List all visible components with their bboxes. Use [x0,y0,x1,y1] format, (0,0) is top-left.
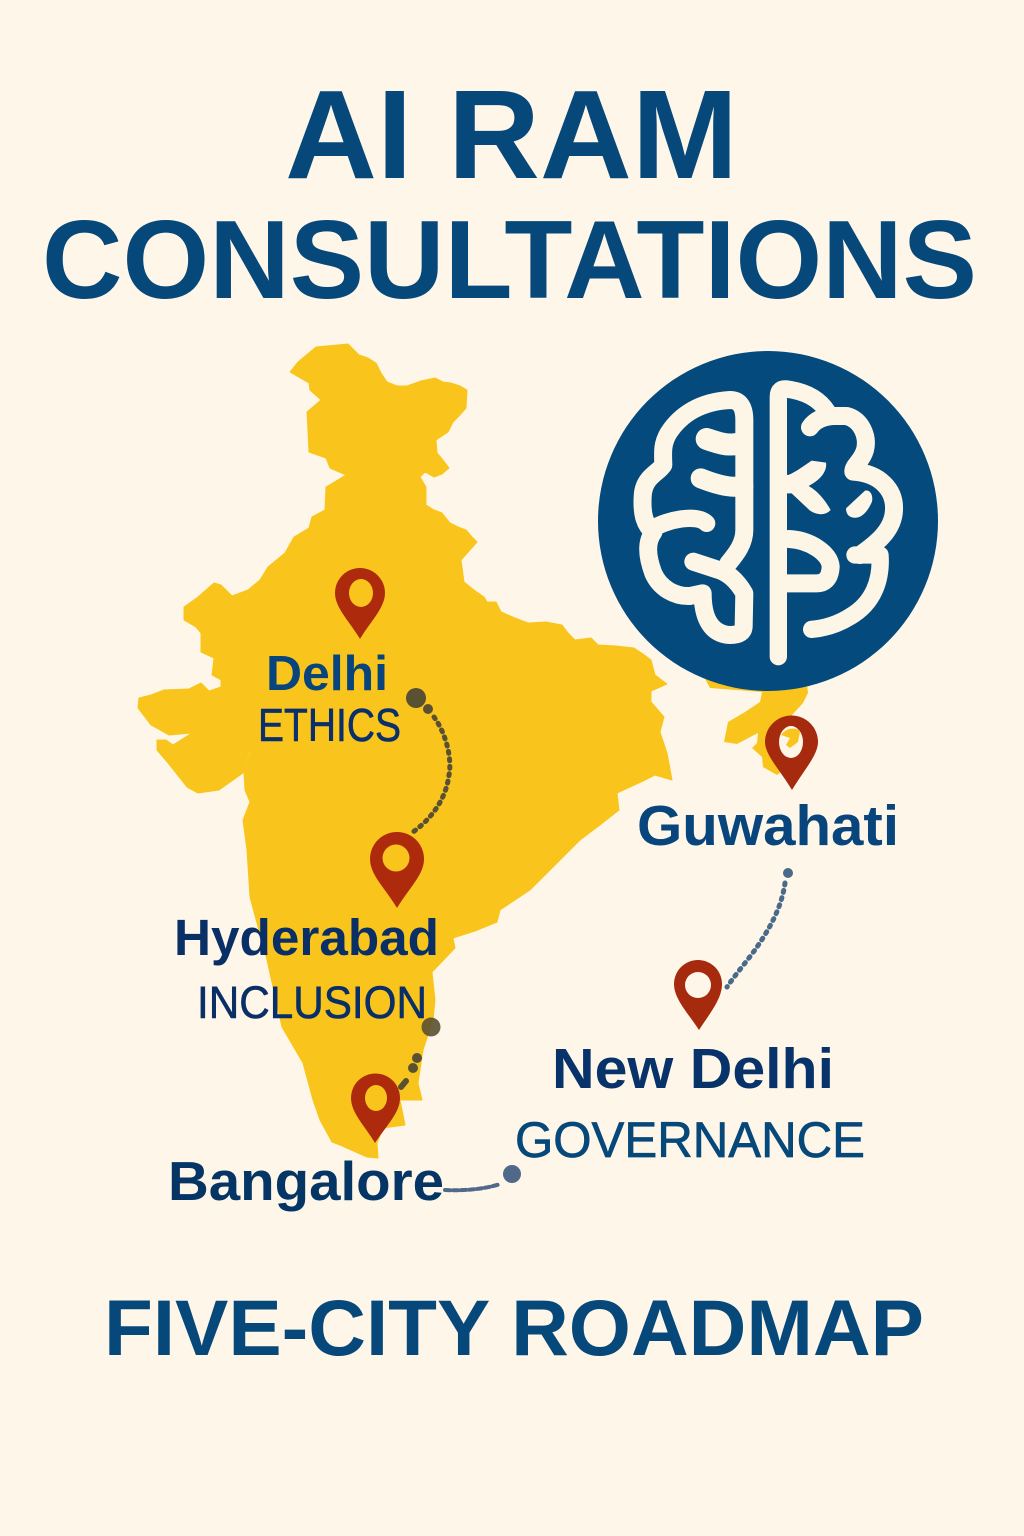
pin: Guwahati [765,716,818,790]
subtitle: FIVE-CITY ROADMAP [104,1283,924,1372]
map fragment: northeast [703,675,808,775]
label: Delhi ETHICS: Delhi [266,647,388,701]
label: Bangalore: Bangalore [168,1150,444,1212]
label: Delhi ETHICS [258,647,401,751]
title: AI RAM [285,64,738,205]
map of India [138,344,672,1158]
label: New Delhi GOVERNANCE [515,1037,865,1168]
pin: Bangalore [351,1074,400,1143]
label: New Delhi GOVERNANCE: GOVERNANCE [515,1112,865,1168]
label: Hyderabad INCLUSION: INCLUSION [197,977,427,1028]
pin: Hyderabad [370,832,424,908]
label: New Delhi GOVERNANCE: New Delhi [552,1037,834,1101]
pin: New Delhi [674,960,722,1030]
pin: Delhi [335,568,385,639]
label: Hyderabad INCLUSION: Hyderabad [174,909,439,966]
route: Guwahati to New Delhi [727,868,793,987]
label: Delhi ETHICS: ETHICS [258,699,401,751]
icon: brain in circle [598,351,938,691]
title [42,64,977,322]
title: CONSULTATIONS [42,198,977,322]
route: Bangalore to New Delhi [445,1165,521,1190]
label: Hyderabad INCLUSION [174,909,439,1028]
label: Guwahati: Guwahati [637,794,899,858]
route: Hyderabad to Bangalore [401,1018,440,1087]
route: Delhi to Hyderabad [406,688,450,832]
